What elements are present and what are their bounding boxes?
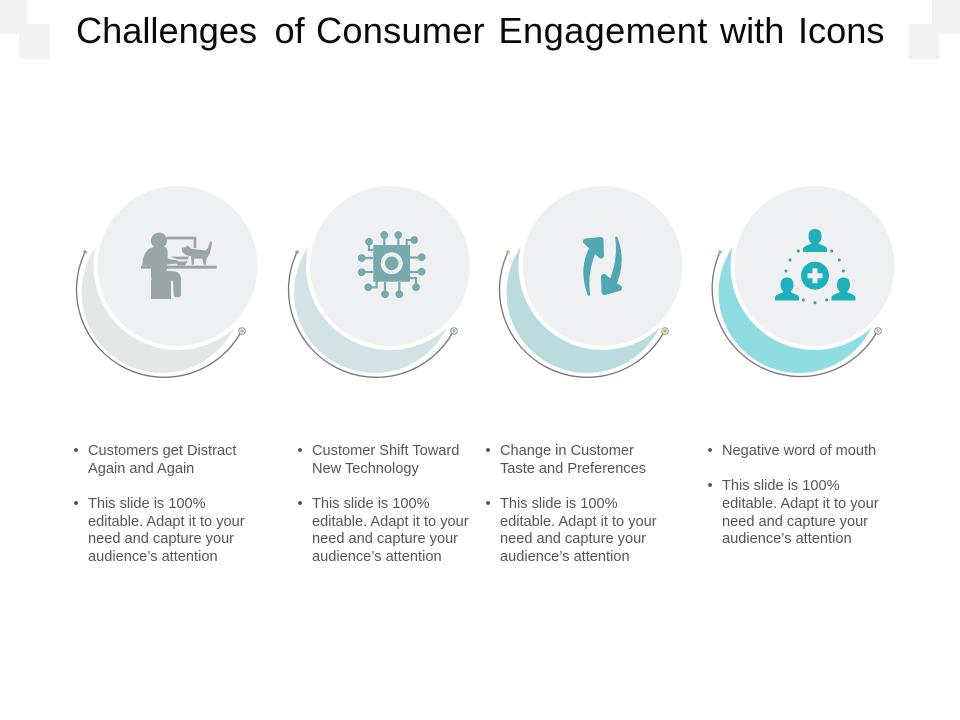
text: panel 2: editable. Adapt it to your <box>312 514 469 530</box>
text: panel 4: • <box>708 478 713 494</box>
title: of <box>274 10 306 51</box>
crescent: panel 3 <box>506 212 668 373</box>
title: Icons <box>798 10 884 51</box>
marker: panel 1 end <box>239 328 245 334</box>
text: panel 4: editable. Adapt it to your <box>722 496 879 512</box>
text: panel 1 <box>74 443 245 565</box>
text: panel 3: audience’s attention <box>500 549 630 565</box>
title: Consumer <box>316 10 485 51</box>
icon: person at desk with cat <box>141 233 217 299</box>
icon: microchip <box>358 231 426 298</box>
text: panel 3: need and capture your <box>500 531 646 547</box>
text: panel 1: • <box>74 496 79 512</box>
disc: panel 3 <box>520 184 684 348</box>
icon: people network with plus <box>775 229 856 304</box>
text: panel 2: • <box>298 496 303 512</box>
text: panel 4: audience’s attention <box>722 531 852 547</box>
text: panel 2: Customer Shift Toward <box>312 443 459 459</box>
text: panel 2 <box>298 443 469 565</box>
text: panel 4: need and capture your <box>722 514 868 530</box>
arc: panel 1 <box>77 252 241 377</box>
text: panel 4: Negative word of mouth <box>722 443 876 459</box>
text: panel 4: • <box>708 443 713 459</box>
text: panel 1: • <box>74 443 79 459</box>
text: panel 1: audience’s attention <box>88 549 218 565</box>
text: panel 1: need and capture your <box>88 531 234 547</box>
title: with <box>719 10 784 51</box>
marker: panel 4 start <box>718 250 722 254</box>
text: panel 3 <box>486 443 657 565</box>
text: panel 3: Taste and Preferences <box>500 461 646 477</box>
text: panel 3: • <box>486 443 491 459</box>
text: panel 3: This slide is 100% <box>500 496 618 512</box>
marker: panel 2 start <box>295 250 299 254</box>
text: panel 3: Change in Customer <box>500 443 634 459</box>
panel: word of mouth <box>708 184 896 547</box>
text: panel 1: editable. Adapt it to your <box>88 514 245 530</box>
text: panel 4 <box>708 443 879 547</box>
text: panel 2: This slide is 100% <box>312 496 430 512</box>
panel: distraction <box>74 184 260 565</box>
marker: panel 4 end <box>875 328 881 334</box>
arc: panel 4 <box>712 252 877 377</box>
arc: panel 3 <box>500 252 664 377</box>
title: Challenges <box>76 10 257 51</box>
crescent: panel 1 <box>82 212 242 373</box>
icon: exchange arrows <box>584 238 621 295</box>
text: panel 2: need and capture your <box>312 531 458 547</box>
crescent: panel 2 <box>294 212 455 373</box>
marker: panel 3 end <box>662 328 668 334</box>
text: panel 4: This slide is 100% <box>722 478 840 494</box>
disc: panel 1 <box>96 184 260 348</box>
text: panel 2: • <box>298 443 303 459</box>
panel: changing preferences <box>486 184 684 565</box>
panel: technology <box>289 184 472 565</box>
text: panel 2: audience’s attention <box>312 549 442 565</box>
text: panel 1: Customers get Distract <box>88 443 236 459</box>
text: panel 3: editable. Adapt it to your <box>500 514 657 530</box>
disc: panel 4 <box>732 184 896 348</box>
text: panel 1: Again and Again <box>88 461 194 477</box>
marker: panel 1 start <box>83 250 87 254</box>
arc: panel 2 <box>289 252 453 377</box>
disc: panel 2 <box>308 184 472 348</box>
title: Engagement <box>498 10 708 51</box>
text: panel 3: • <box>486 496 491 512</box>
text: panel 2: New Technology <box>312 461 420 477</box>
text: panel 1: This slide is 100% <box>88 496 206 512</box>
marker: panel 3 start <box>506 250 510 254</box>
marker: panel 2 end <box>451 328 457 334</box>
crescent: panel 4 <box>718 212 880 373</box>
